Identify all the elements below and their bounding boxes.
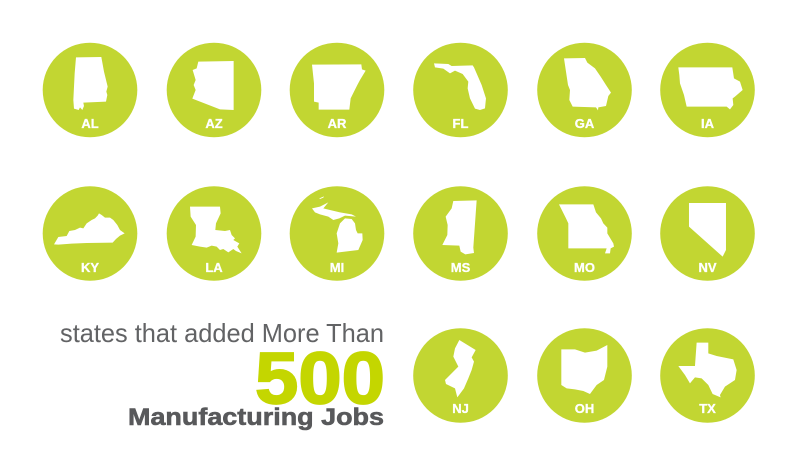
badge: NJ: NJ xyxy=(452,401,469,416)
badge: OH: OH xyxy=(575,401,594,416)
badge: NV: NV xyxy=(698,260,717,275)
badge: NJ xyxy=(413,328,508,423)
badge: AR: AR xyxy=(328,116,347,131)
badge: OH xyxy=(537,328,632,423)
badge: FL xyxy=(413,43,508,137)
badge: GA xyxy=(537,43,632,137)
badge: TX: TX xyxy=(699,401,716,416)
badge: MI: MI xyxy=(330,260,344,275)
badge: IA xyxy=(660,43,755,137)
heading: manufacturing jobs: Manufacturing Jobs xyxy=(128,404,384,431)
badge: AR xyxy=(290,43,384,137)
badge: GA: GA xyxy=(575,116,595,131)
badge: NV xyxy=(660,186,755,281)
badge: LA: LA xyxy=(205,260,223,275)
badge: MO xyxy=(537,186,632,281)
badge: AL xyxy=(43,43,137,137)
heading: states that added more than: states that added More Than xyxy=(60,318,384,348)
badge: AZ: AZ xyxy=(205,116,223,131)
badge: MS: MS xyxy=(451,260,471,275)
badge: LA xyxy=(167,186,261,281)
badge: AL: AL xyxy=(81,116,99,131)
badge: MI xyxy=(290,186,384,281)
badge: MO: MO xyxy=(574,260,595,275)
badge: MS xyxy=(413,186,508,281)
big number: 500: 500 xyxy=(255,338,385,420)
badge: KY: KY xyxy=(81,260,99,275)
badge: AZ xyxy=(167,43,261,137)
badge: IA: IA xyxy=(701,116,715,131)
badge: TX xyxy=(660,328,755,423)
badge: KY xyxy=(43,186,137,281)
badge: FL: FL xyxy=(453,116,468,131)
